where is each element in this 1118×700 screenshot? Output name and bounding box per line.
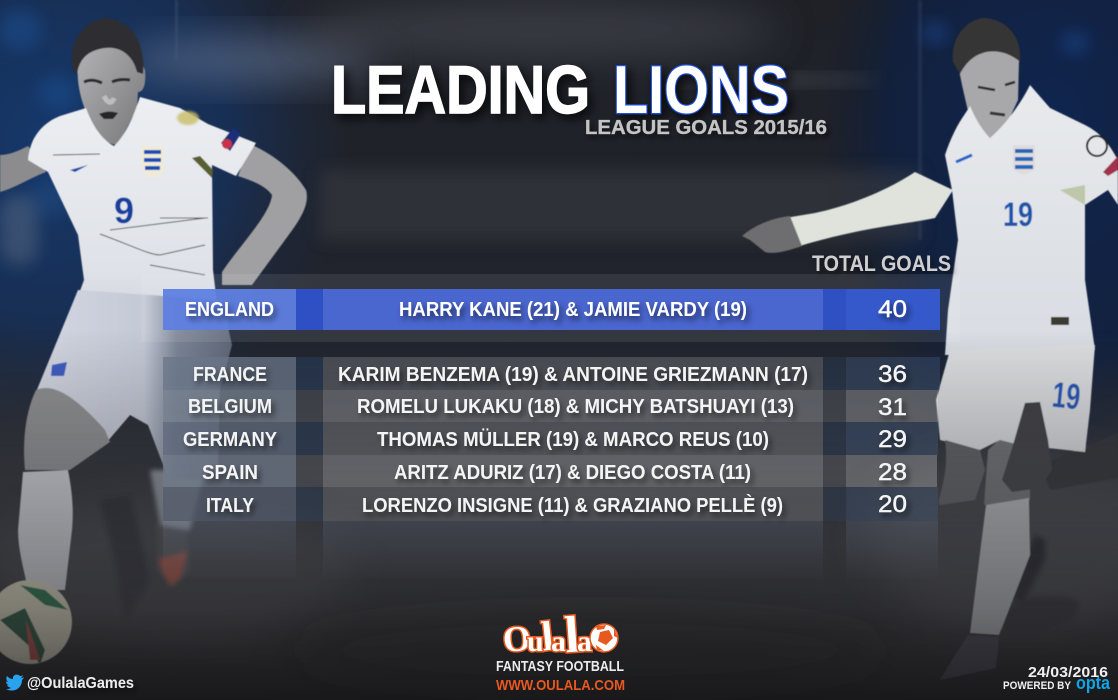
fade columns — [163, 521, 938, 581]
row: Belgium — [163, 390, 938, 422]
standing boot — [940, 635, 999, 680]
shirt details — [53, 111, 241, 275]
right arm — [222, 144, 307, 285]
row: England highlight: ENGLAND — [185, 299, 274, 321]
shorts — [36, 290, 232, 480]
logo: opta: opta — [1076, 673, 1111, 693]
shirt sleeve arm — [785, 172, 953, 246]
credit: powered by: POWERED BY — [1003, 680, 1072, 692]
shorts number: 19 — [1050, 374, 1082, 417]
left arm — [0, 146, 46, 192]
row: England highlight: 40 — [878, 296, 907, 323]
title: Leading Lions — [331, 52, 789, 128]
logo caption: fantasy football: FANTASY FOOTBALL — [496, 658, 624, 675]
head and hair — [72, 18, 145, 145]
row: Belgium: ROMELU LUKAKU (18) & MICHY BATSHUAYI (13) — [357, 396, 794, 418]
shirt details — [956, 136, 1118, 325]
shirt details: 19 — [1003, 196, 1033, 234]
player: Jamie Vardy — [742, 18, 1118, 680]
raised leg — [1040, 433, 1118, 490]
row: Germany: 29 — [878, 426, 907, 453]
row: Germany: THOMAS MÜLLER (19) & MARCO REUS (10) — [377, 428, 769, 451]
column heading: total goals: TOTAL GOALS — [812, 251, 951, 276]
row: Belgium: BELGIUM — [188, 396, 272, 418]
icon: twitter bird — [6, 675, 24, 691]
wordmark: a — [577, 625, 592, 658]
player: Harry Kane — [0, 18, 307, 665]
ball — [0, 580, 72, 665]
row: Belgium: 31 — [878, 394, 907, 421]
standing leg and sock — [970, 498, 1030, 635]
neck and head — [953, 18, 1020, 138]
wordmark: l — [563, 606, 581, 664]
wordmark: u — [527, 625, 544, 658]
wordmark: l — [539, 614, 556, 661]
row: England highlight: HARRY KANE (21) & JAMIE VARDY (19) — [399, 299, 747, 321]
row: Italy: 20 — [878, 491, 907, 518]
row: England highlight — [141, 274, 960, 342]
raised boot — [1002, 402, 1052, 492]
row: Spain: SPAIN — [202, 462, 258, 484]
thigh — [24, 388, 110, 470]
row: Italy: LORENZO INSIGNE (11) & GRAZIANO PELLÈ (9) — [362, 494, 783, 517]
wordmark — [502, 606, 592, 664]
row: Italy: ITALY — [206, 495, 255, 517]
row: Germany: GERMANY — [183, 429, 278, 451]
row: France: FRANCE — [193, 364, 267, 386]
website link: WWW.OULALA.COM — [496, 677, 625, 694]
date: 24/03/2016 — [1028, 664, 1108, 681]
row: Spain: ARITZ ADURIZ (17) & DIEGO COSTA (11) — [394, 462, 751, 484]
logo: Oulala — [502, 606, 618, 664]
shirt — [28, 97, 256, 345]
shirt — [945, 85, 1118, 355]
row: Spain: 28 — [878, 459, 907, 486]
subtitle: LEAGUE GOALS 2015/16 — [585, 117, 827, 139]
rear leg and boot — [100, 470, 205, 620]
hand — [742, 216, 802, 253]
row: Germany — [163, 422, 938, 455]
shorts badge — [51, 362, 67, 376]
title: Leading Lions: LIONS — [613, 52, 789, 128]
wordmark: O — [502, 618, 532, 660]
shirt details: 9 — [114, 190, 134, 231]
title: Leading Lions: LEADING — [331, 52, 590, 128]
twitter handle: @OulalaGames — [27, 675, 134, 692]
row: France: KARIM BENZEMA (19) & ANTOINE GRIEZMANN (17) — [338, 364, 808, 386]
thigh shadow — [939, 440, 985, 505]
row: Spain — [163, 455, 937, 487]
sock — [18, 470, 73, 590]
row: France — [163, 357, 940, 390]
shorts — [936, 345, 1095, 452]
row: France: 36 — [878, 361, 907, 388]
table: rankings — [141, 274, 960, 581]
fog overlay — [0, 330, 1118, 700]
icon: football — [590, 624, 618, 652]
row: Italy — [163, 487, 938, 521]
knee — [984, 425, 1030, 505]
trailing foot — [992, 535, 1079, 632]
wordmark: a — [551, 625, 566, 658]
